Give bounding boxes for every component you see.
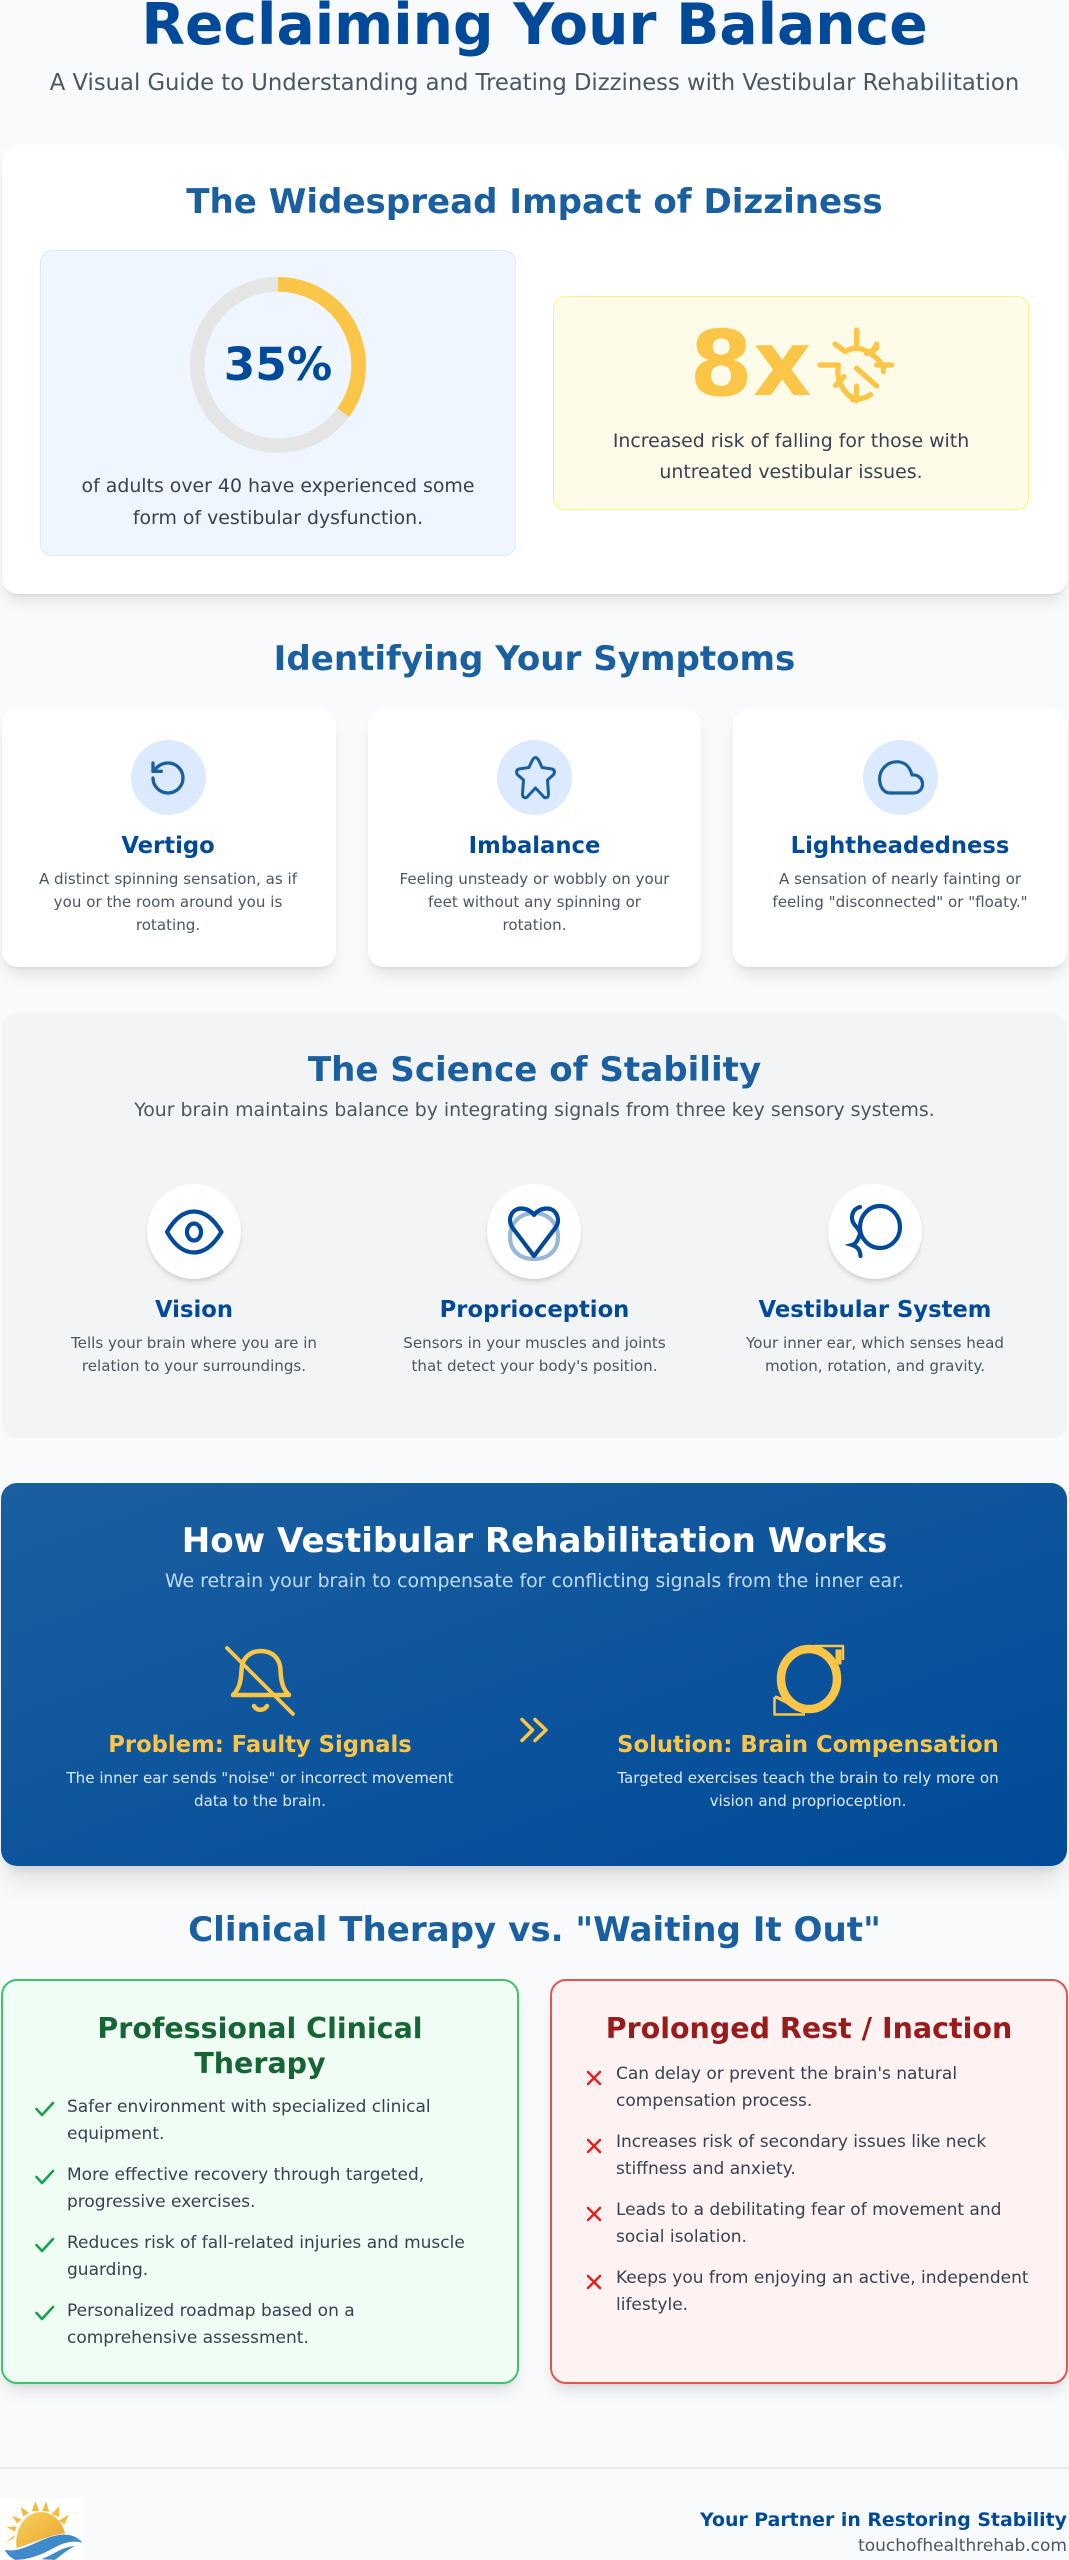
heading: science: The Science of Stability	[308, 1050, 761, 1090]
panel: science of stability	[2, 1013, 1067, 1438]
text: vestibular	[746, 1334, 1004, 1375]
stat text: falling risk	[613, 430, 969, 483]
stat text: falling risk: untreated vestibular issues.	[659, 461, 923, 483]
title: vision: Vision	[155, 1297, 233, 1323]
text: imbalance: rotation.	[502, 916, 566, 934]
panel: how it works	[1, 1483, 1067, 1866]
list: rest risks: Increases risk of secondary issues like neck	[616, 2132, 986, 2152]
stat text: falling risk: Increased risk of falling for those with	[613, 430, 969, 452]
icon: brain compensation	[773, 1644, 844, 1716]
list: therapy benefits: More effective recovery through targeted,	[67, 2165, 424, 2185]
cross 2	[586, 2138, 602, 2154]
text: vertigo	[39, 870, 298, 934]
text: vertigo: A distinct spinning sensation, as if	[39, 870, 297, 888]
text: proprioception: that detect your body's position.	[412, 1357, 658, 1375]
text: lightheadedness: feeling "disconnected" or "floaty."	[772, 893, 1028, 911]
footer website: touchofhealthrehab.com	[858, 2536, 1067, 2556]
card: imbalance	[368, 709, 701, 967]
text: solution	[617, 1769, 999, 1810]
heading: comparison: Clinical Therapy vs. "Waiting It Out"	[188, 1910, 881, 1950]
heading: how it works: How Vestibular Rehabilitation Works	[182, 1521, 887, 1561]
stat text: adults over 40	[82, 475, 474, 528]
icon: proprioception	[487, 1184, 581, 1279]
subtitle: A Visual Guide to Understanding and Treating Dizziness with Vestibular Rehabilitation	[50, 70, 1019, 96]
list: rest risks: social isolation.	[616, 2226, 747, 2246]
title: lightheadedness: Lightheadedness	[791, 833, 1009, 859]
title: vestibular: Vestibular System	[759, 1297, 991, 1323]
check 3	[35, 2238, 54, 2252]
arrow: double chevron	[520, 1718, 548, 1742]
subtitle: science: Your brain maintains balance by integrating signals from three key sensory systems.	[134, 1099, 935, 1121]
panel: prolonged rest	[550, 1979, 1068, 2384]
title: professional therapy: Therapy	[194, 2046, 326, 2080]
title: imbalance: Imbalance	[469, 833, 600, 859]
text: vision: Tells your brain where you are in	[71, 1334, 317, 1352]
stat text: adults over 40: of adults over 40 have experienced some	[82, 475, 474, 497]
list: therapy benefits	[35, 2097, 465, 2348]
text: vestibular: Your inner ear, which senses head	[746, 1334, 1004, 1352]
text: imbalance	[400, 870, 670, 934]
cross 1	[586, 2070, 602, 2086]
title: problem: Problem: Faulty Signals	[108, 1732, 412, 1758]
text: solution: Targeted exercises teach the brain to rely more on	[617, 1769, 999, 1787]
list: rest risks: compensation process.	[616, 2090, 812, 2110]
title: professional therapy: Professional Clinical	[97, 2012, 423, 2045]
title: prolonged rest: Prolonged Rest / Inaction	[606, 2012, 1012, 2045]
cross 4	[586, 2274, 602, 2290]
list: rest risks: stiffness and anxiety.	[616, 2158, 796, 2178]
icon: vestibular	[828, 1184, 922, 1279]
list: therapy benefits: progressive exercises.	[67, 2192, 255, 2212]
list: rest risks	[586, 2064, 1029, 2314]
text: imbalance: feet without any spinning or	[428, 893, 641, 911]
icon: vision	[147, 1184, 241, 1279]
cross 3	[586, 2206, 602, 2222]
card: lightheadedness	[733, 709, 1067, 967]
list: rest risks: Can delay or prevent the brain's natural	[616, 2064, 957, 2084]
icon: dizzy burst	[817, 327, 894, 404]
list: therapy benefits: guarding.	[67, 2260, 148, 2280]
icon: vertigo	[131, 740, 206, 815]
list: rest risks: lifestyle.	[616, 2294, 688, 2314]
card: vertigo	[2, 709, 336, 967]
list: therapy benefits: equipment.	[67, 2124, 164, 2144]
text: vision: relation to your surroundings.	[82, 1357, 306, 1375]
stat value: 35%: 35%	[224, 338, 332, 391]
donut chart: 35%	[190, 277, 366, 453]
footer tagline: Your Partner in Restoring Stability	[700, 2509, 1067, 2531]
check 1	[35, 2102, 54, 2116]
list: therapy benefits: Reduces risk of fall-related injuries and muscle	[67, 2233, 465, 2253]
list: therapy benefits: Safer environment with specialized clinical	[67, 2097, 431, 2117]
text: proprioception	[403, 1334, 666, 1375]
list: rest risks: Keeps you from enjoying an active, independent	[616, 2268, 1029, 2288]
text: vestibular: motion, rotation, and gravity.	[765, 1357, 985, 1375]
text: problem	[66, 1769, 454, 1810]
stat text: adults over 40: form of vestibular dysfunction.	[133, 506, 423, 528]
panel: widespread impact	[2, 145, 1067, 594]
list: therapy benefits: comprehensive assessment.	[67, 2328, 309, 2348]
text: problem: The inner ear sends "noise" or incorrect movement	[66, 1769, 454, 1787]
text: lightheadedness: A sensation of nearly fainting or	[779, 870, 1021, 888]
stat card: 8x	[553, 296, 1029, 510]
stat value: 8x: 8x	[690, 312, 812, 417]
list: rest risks: Leads to a debilitating fear of movement and	[616, 2200, 1001, 2220]
text: proprioception: Sensors in your muscles and joints	[403, 1334, 666, 1352]
title: proprioception: Proprioception	[440, 1297, 629, 1323]
check 2	[35, 2170, 54, 2184]
icon: imbalance	[497, 740, 572, 815]
heading: symptoms: Identifying Your Symptoms	[274, 639, 795, 679]
logo: sun and waves	[5, 2501, 82, 2560]
panel: professional therapy	[1, 1979, 519, 2384]
check 4	[35, 2306, 54, 2320]
subtitle: how it works: We retrain your brain to compensate for conflicting signals from the inner ear.	[165, 1570, 904, 1592]
title: vertigo: Vertigo	[121, 833, 215, 859]
text: vertigo: you or the room around you is	[54, 893, 282, 911]
title: professional therapy	[97, 2012, 423, 2080]
heading: impact: The Widespread Impact of Dizziness	[186, 182, 883, 222]
text: vision	[70, 1334, 317, 1375]
text: solution: vision and proprioception.	[710, 1792, 906, 1810]
stat card: 35 percent	[40, 250, 516, 556]
icon: bell off	[225, 1646, 295, 1716]
title: solution: Solution: Brain Compensation	[617, 1732, 999, 1758]
text: vertigo: rotating.	[136, 916, 200, 934]
text: imbalance: Feeling unsteady or wobbly on your	[400, 870, 669, 888]
icon: lightheadedness	[863, 740, 938, 815]
text: problem: data to the brain.	[194, 1792, 326, 1810]
text: lightheadedness	[772, 870, 1028, 911]
list: therapy benefits: Personalized roadmap based on a	[67, 2301, 355, 2321]
